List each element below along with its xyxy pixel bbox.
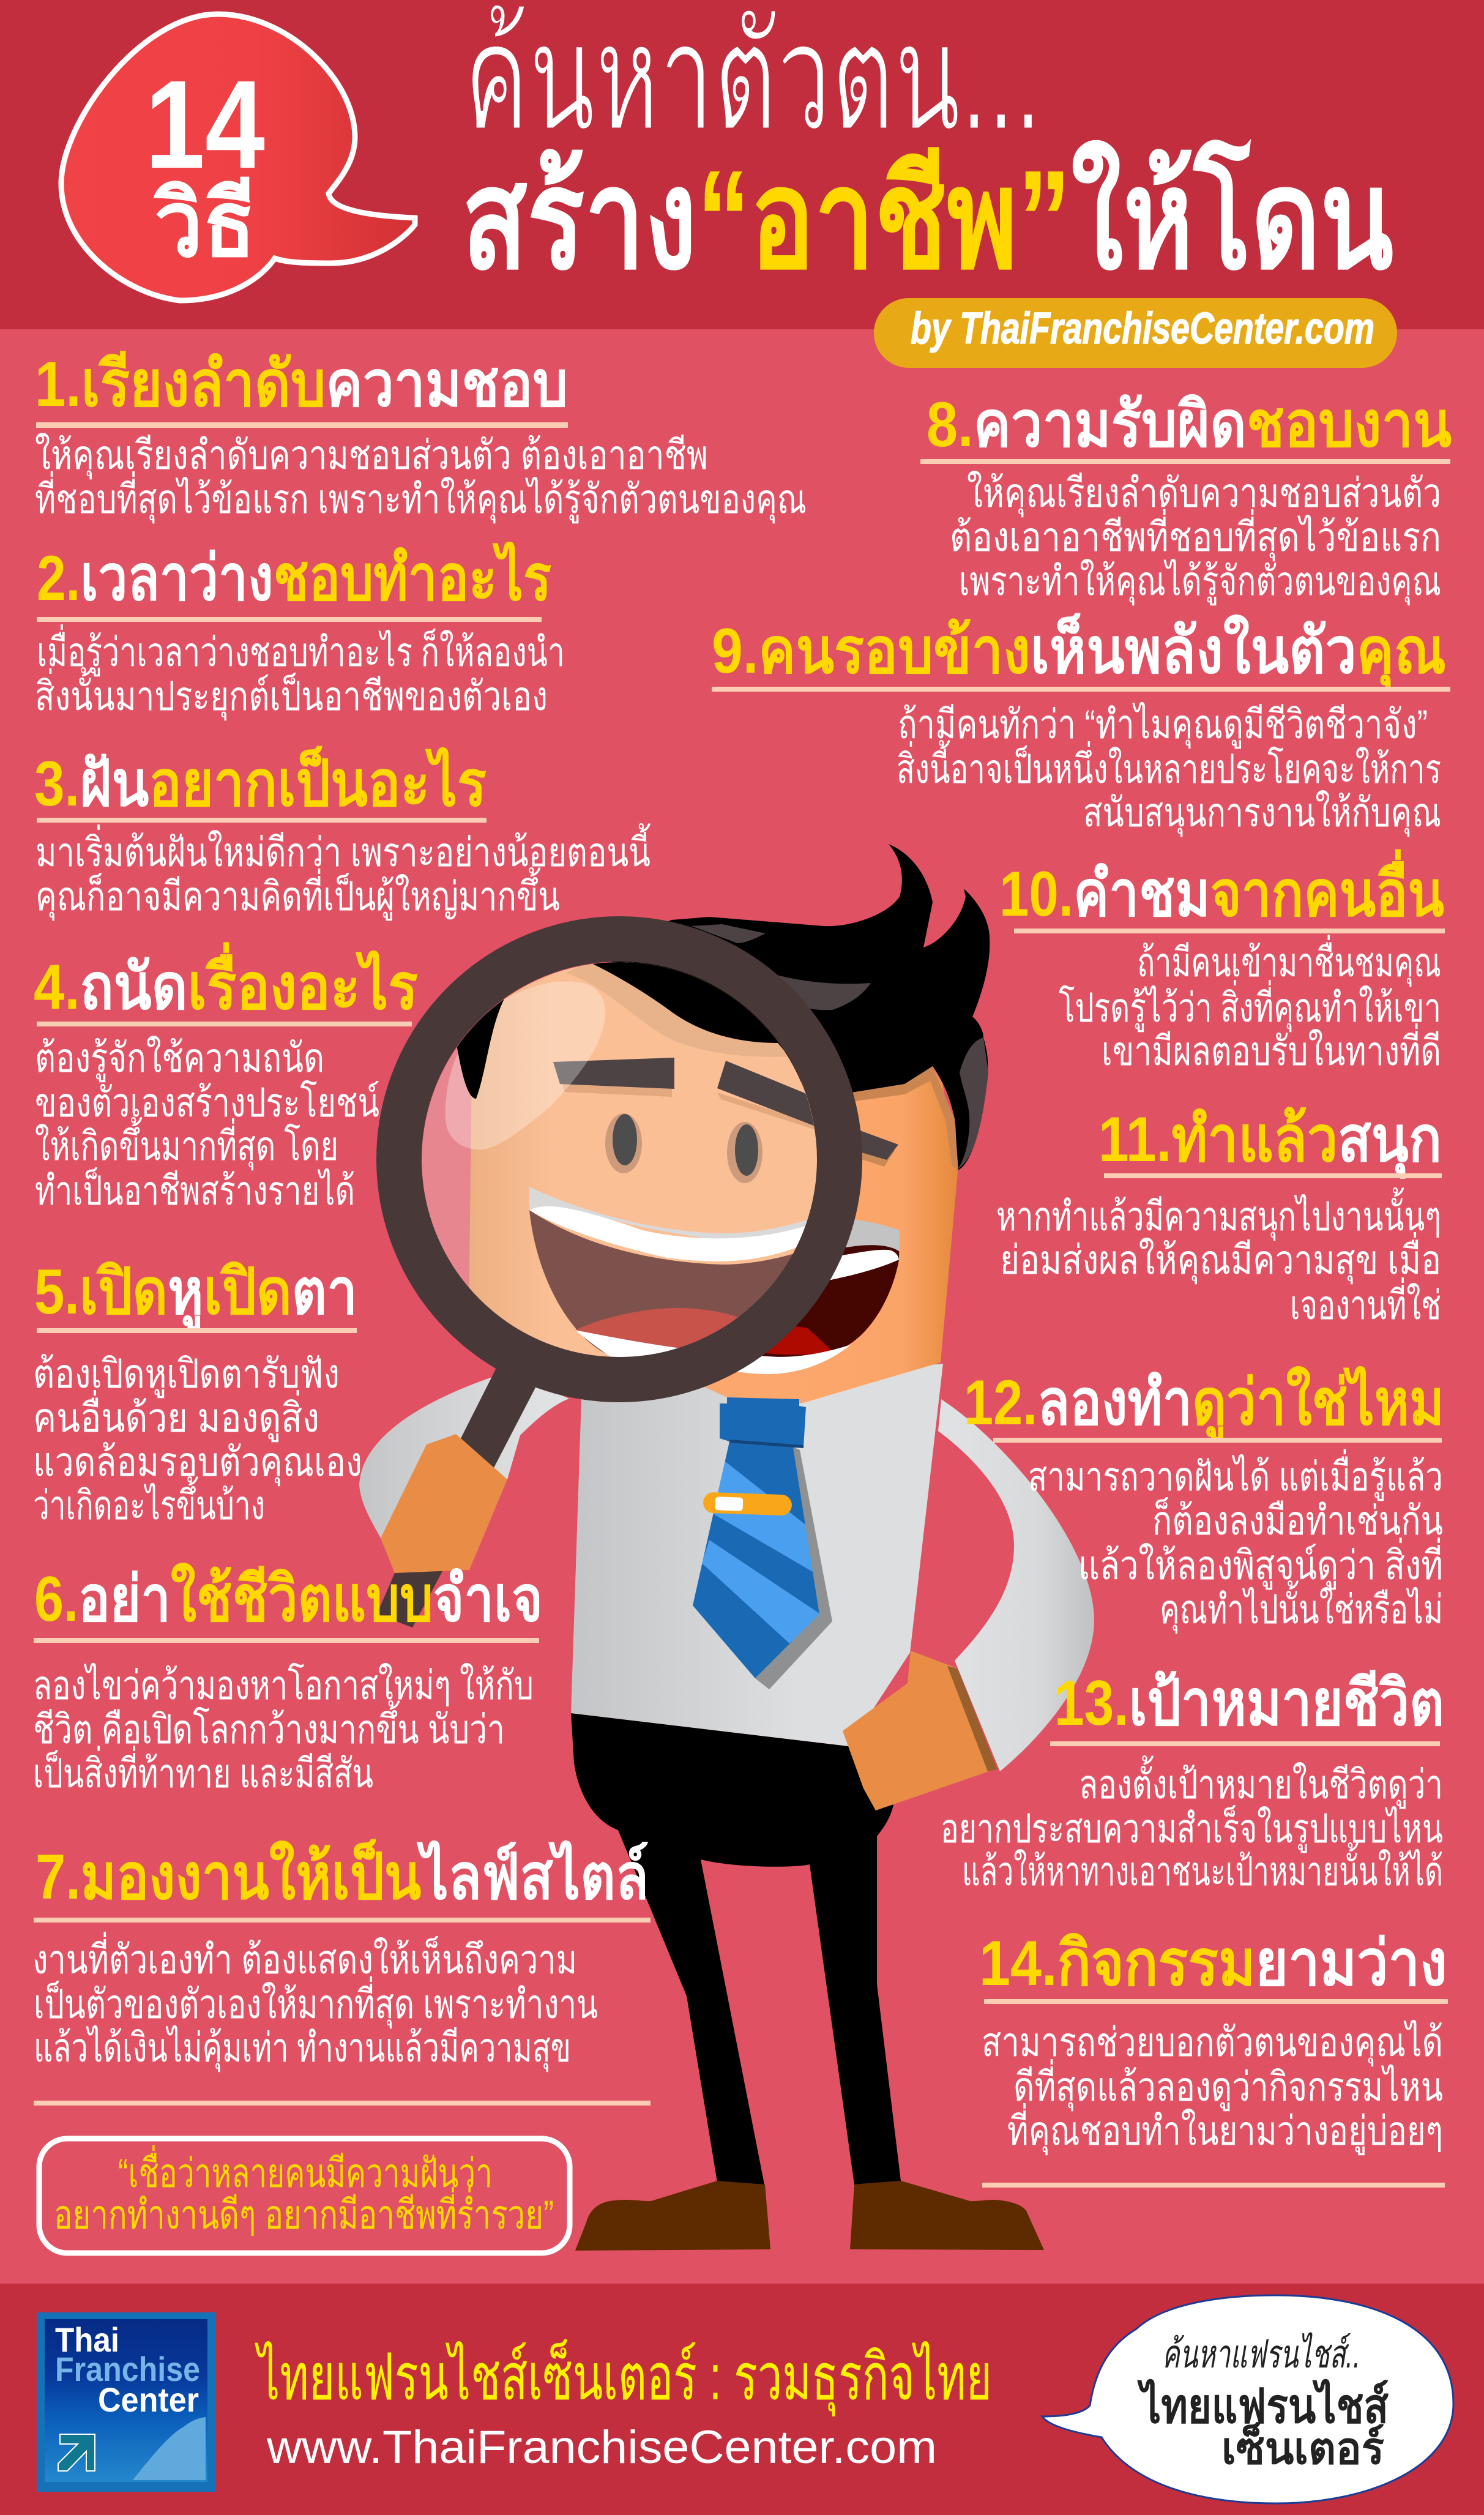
body 5: ว่าเกิดอะไรขึ้นบ้าง: [33, 1476, 265, 1528]
body 6: ลองไขว่คว้ามองหาโอกาสใหม่ๆ ให้กับ: [33, 1662, 534, 1708]
footer tagline: ไทยแฟรนไชส์เซ็นเตอร์ : รวมธุรกิจไทย: [255, 2339, 992, 2416]
body 5: [33, 1351, 362, 1528]
left sleeve: [359, 1376, 569, 1538]
heading 8: 8.ความรับผิดชอบงาน: [927, 389, 1452, 460]
item 1: [35, 349, 807, 524]
face in lens: [469, 962, 817, 1357]
left hand: [381, 1434, 507, 1573]
body 3: มาเริ่มต้นฝันใหม่ดีกว่า เพราะอย่างน้อยตอนนี้: [35, 823, 651, 875]
item 2: [35, 542, 565, 721]
heading 5: 5.เปิดหูเปิดตา: [34, 1257, 357, 1331]
byline pill: [874, 298, 1397, 368]
body 6: ชีวิต คือเปิดโลกกว้างมากขึ้น นับว่า: [33, 1700, 505, 1752]
body 7: เป็นตัวของตัวเองให้มากที่สุด เพราะทำงาน: [34, 1976, 598, 2029]
tie: [693, 1397, 823, 1678]
right eye: [727, 1122, 763, 1183]
speech bubble badge: [61, 14, 415, 301]
logo wing: [133, 2417, 206, 2480]
footer logo: [37, 2312, 215, 2492]
right sleeve: [938, 1399, 1094, 1771]
heading 4: 4.ถนัดเรื่องอะไร: [34, 942, 418, 1023]
lens highlight: [446, 981, 605, 1149]
item 5: [33, 1257, 362, 1528]
title line 2: สร้าง“อาชีพ”ให้โดน: [462, 138, 1393, 297]
item 12: [964, 1366, 1444, 1634]
item 14: [979, 1928, 1448, 2188]
heading 6: 6.อย่าใช้ชีวิตแบบจำเจ: [34, 1563, 543, 1635]
word: methods: วิธี: [153, 173, 256, 275]
logo wordmark: Thai: [55, 2320, 119, 2359]
header band: [0, 0, 1484, 329]
left eye: [605, 1113, 642, 1173]
magnifier ring: [399, 939, 840, 1380]
logo arrow: [58, 2434, 95, 2471]
body 4: ให้เกิดขึ้นมากที่สุด โดย: [35, 1117, 338, 1171]
logo wordmark: Center: [98, 2380, 199, 2419]
bubble shape: [61, 14, 415, 301]
hair shadow: [567, 962, 788, 1056]
right shoe: [850, 2181, 1044, 2250]
body 5: คนอื่นด้วย มองดูสิ่ง: [33, 1390, 319, 1443]
logo wordmark: [55, 2320, 200, 2419]
footer speech bubble: [1042, 2295, 1453, 2503]
item 3: [34, 745, 651, 921]
item 13: [941, 1668, 1444, 1894]
item 10: [999, 849, 1445, 1074]
heading 7: 7.มองงานให้เป็นไลฟ์สไตล์: [35, 1838, 649, 1913]
body 10: [1059, 935, 1441, 1074]
heading 1: 1.เรียงลำดับความชอบ: [35, 349, 568, 420]
right eyebrow outer part: [845, 1129, 895, 1167]
footer text: [255, 2339, 992, 2473]
title: [462, 0, 1393, 297]
item 6: [33, 1563, 543, 1796]
body 8: [950, 470, 1441, 606]
hair: [612, 844, 990, 1170]
body 4: ของตัวเองสร้างประโยชน์: [35, 1080, 379, 1125]
heading 3: 3.ฝันอยากเป็นอะไร: [34, 745, 487, 820]
body 3: [35, 823, 651, 921]
body 6: [33, 1662, 534, 1796]
bubble bold line 1: ไทยแฟรนไชส์: [1137, 2379, 1389, 2433]
heading 12: 12.ลองทำดูว่าใช่ไหม: [964, 1366, 1444, 1442]
body 5: แวดล้อมรอบตัวคุณเอง: [33, 1439, 362, 1487]
heading 10: 10.คำชมจากคนอื่น: [999, 849, 1444, 930]
item 8: [920, 389, 1452, 606]
body 1: ที่ชอบที่สุดไว้ข้อแรก เพราะทำให้คุณได้รู้จักตัวตนของคุณ: [35, 471, 807, 524]
right hand: [843, 1651, 989, 1811]
quote text: [54, 2145, 554, 2237]
item 9: [712, 612, 1450, 837]
right eyebrow: [717, 1061, 815, 1130]
body 4: ทำเป็นอาชีพสร้างรายได้: [35, 1167, 355, 1213]
bubble bold line 2: เซ็นเตอร์: [1221, 2422, 1384, 2473]
footer url: www.ThaiFranchiseCenter.com: [266, 2421, 937, 2473]
logo wordmark: Franchise: [55, 2350, 200, 2388]
number 14: 14: [145, 54, 265, 195]
lens tint: [422, 962, 816, 1288]
body 4: ต้องรู้จักใช้ความถนัด: [35, 1035, 324, 1083]
hairline shadow: [851, 1066, 958, 1170]
body 7: แล้วได้เงินไม่คุ้มเท่า ทำงานแล้วมีความสุข: [34, 2025, 571, 2072]
body 13: [941, 1755, 1443, 1894]
body 6: เป็นสิ่งที่ท้าทาย และมีสีสัน: [33, 1746, 373, 1796]
bubble small line: ค้นหาแฟรนไชส์..: [1162, 2332, 1360, 2376]
quote box: [39, 2139, 570, 2253]
trousers: [571, 1713, 901, 2184]
heading 2: 2.เวลาว่างชอบทำอะไร: [37, 542, 551, 614]
tie clip: [703, 1492, 792, 1516]
body 14: [982, 2019, 1443, 2156]
hair in lens: [593, 962, 785, 1052]
quote text: อยากทำงานดีๆ อยากมีอาชีพที่ร่ำรวย”: [54, 2187, 554, 2237]
mouth in lens: [529, 1210, 793, 1354]
item 11: [996, 1104, 1442, 1328]
body 1: [35, 432, 807, 524]
body 11: [996, 1187, 1441, 1328]
body 2: เมื่อรู้ว่าเวลาว่างชอบทำอะไร ก็ให้ลองนำ: [37, 624, 565, 677]
body 7: [32, 1932, 598, 2072]
shirt: [571, 1364, 943, 1746]
item 7: [32, 1838, 651, 2106]
left shoe: [575, 2181, 770, 2251]
body 1: ให้คุณเรียงลำดับความชอบส่วนตัว ต้องเอาอาชีพ: [35, 432, 708, 480]
body 2: สิ่งนั้นมาประยุกต์เป็นอาชีพของตัวเอง: [35, 667, 548, 721]
body 7: งานที่ตัวเองทำ ต้องแสดงให้เห็นถึงความ: [32, 1932, 577, 1982]
heading 14: 14.กิจกรรมยามว่าง: [979, 1928, 1447, 1999]
body 2: [35, 624, 565, 721]
head: [551, 979, 958, 1403]
hair highlights: [692, 924, 988, 1169]
left eyebrow: [553, 1058, 674, 1097]
body 9: [897, 701, 1441, 837]
item 4: [34, 942, 418, 1213]
magnifier handle: [377, 1368, 535, 1627]
character illustration: man with magnifying glass: [359, 844, 1094, 2251]
view through magnifying lens: [422, 962, 817, 1357]
body 3: คุณก็อาจมีความคิดที่เป็นผู้ใหญ่มากขึ้น: [35, 867, 560, 921]
quote text: “เชื่อว่าหลายคนมีความฝันว่า: [118, 2145, 493, 2195]
heading 9: 9.คนรอบข้างเห็นพลังในตัวคุณ: [712, 612, 1446, 690]
body 12: [1028, 1449, 1443, 1634]
body 4: [35, 1035, 379, 1213]
footer band: [0, 2284, 1484, 2515]
heading 11: 11.ทำแล้วสนุก: [1098, 1104, 1442, 1179]
tie shadow: [755, 1447, 832, 1689]
body 5: ต้องเปิดหูเปิดตารับฟัง: [33, 1351, 340, 1399]
mouth outside lens: [673, 1217, 900, 1374]
side lock: [456, 999, 504, 1099]
right cuff: [947, 1666, 997, 1771]
